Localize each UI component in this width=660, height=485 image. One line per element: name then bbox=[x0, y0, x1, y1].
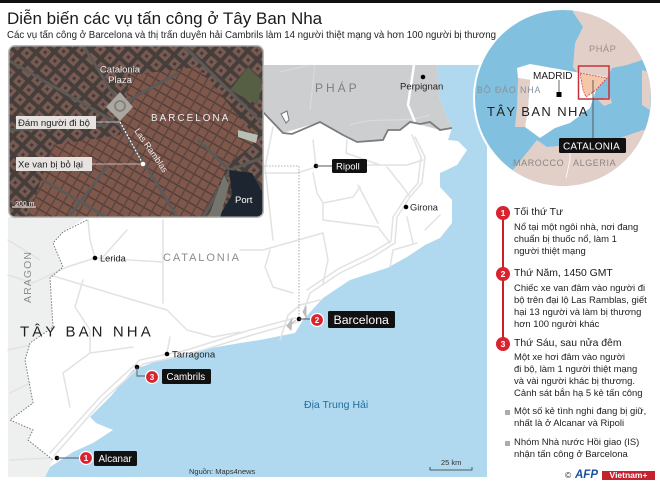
region: France grey bbox=[263, 65, 452, 142]
title: Diễn biến các vụ tấn công ở Tây Ban Nha bbox=[7, 9, 322, 28]
event 3: 3 bbox=[501, 339, 505, 349]
map labels: TÂY BAN NHA bbox=[20, 324, 154, 340]
event 2: Thứ Năm, 1450 GMT bbox=[514, 268, 613, 279]
logos bbox=[565, 469, 655, 481]
note: suspects: Một số kẻ tình nghi đang bị giữ, bbox=[514, 406, 646, 417]
scale bar bbox=[430, 458, 472, 470]
locator globe: ALGERIA bbox=[573, 158, 616, 168]
globe labels: BỒ ĐÀO NHA bbox=[477, 84, 541, 95]
tag: Cambrils: Cambrils bbox=[166, 372, 205, 383]
event 3: Cảnh sát bắn hạ 5 kẻ tấn công bbox=[514, 388, 643, 399]
border: France-Spain bbox=[263, 112, 452, 142]
Catalonia plaza bbox=[106, 92, 133, 121]
map labels: Tarragona bbox=[172, 350, 216, 360]
region: Aragon grey bbox=[8, 217, 87, 477]
satellite background bbox=[8, 45, 264, 218]
event 2: 2 bbox=[501, 269, 505, 279]
map labels: Perpignan bbox=[400, 82, 443, 92]
tag: Barcelona bbox=[310, 311, 395, 328]
event 1: người thiệt mạng bbox=[514, 246, 586, 257]
city dots bbox=[55, 75, 425, 460]
inset connector dotted bbox=[263, 166, 299, 320]
Barcelona urban bbox=[287, 306, 306, 330]
label: Pháp: PHÁP bbox=[315, 80, 360, 95]
label: Catalonia: CATALONIA bbox=[163, 252, 241, 264]
label: Barcelona: BARCELONA bbox=[151, 113, 230, 124]
plaza label: Catalonia bbox=[100, 64, 141, 76]
event 1: Nổ tại một ngôi nhà, nơi đang bbox=[514, 222, 638, 233]
tag: abandoned van bbox=[16, 157, 92, 171]
streets bbox=[8, 45, 264, 218]
tag: Cambrils bbox=[146, 369, 211, 384]
timeline line bbox=[502, 213, 504, 343]
logos: AFP bbox=[575, 469, 598, 481]
tag: Barcelona: Barcelona bbox=[334, 313, 389, 327]
event 3: đi bộ, làm 1 người thiệt mạng bbox=[514, 364, 637, 375]
map labels: Girona bbox=[410, 202, 439, 212]
port bbox=[220, 170, 262, 216]
event 2: bộ trên đại lộ Las Ramblas, giết bbox=[514, 295, 647, 306]
old town bbox=[120, 67, 258, 218]
stadium bbox=[238, 130, 258, 143]
Portugal bbox=[515, 78, 530, 127]
Catalonia bbox=[580, 73, 607, 97]
event 2: hại 13 người và làm bị thương bbox=[514, 307, 641, 318]
note: suspects bbox=[505, 406, 646, 429]
tag: Alcanar: 1 bbox=[84, 454, 89, 463]
scale bar: 25 km bbox=[441, 458, 461, 467]
source: Nguồn: Maps4news bbox=[189, 467, 256, 476]
map labels bbox=[20, 82, 443, 360]
Catalonia locator box bbox=[578, 66, 609, 99]
route bbox=[120, 122, 143, 164]
note: IS: nhận tấn công ở Barcelona bbox=[514, 449, 628, 460]
park bbox=[230, 67, 262, 105]
map labels: Lerida bbox=[100, 254, 127, 264]
tag: Ripoll bbox=[332, 159, 367, 173]
note: suspects: nhất là ở Alcanar và Ripoli bbox=[514, 418, 624, 429]
plaza label bbox=[100, 66, 140, 83]
event 2: hơn 100 người khác bbox=[514, 319, 599, 330]
border: Catalonia-Aragon dotted bbox=[10, 220, 87, 460]
plaza label: Plaza bbox=[108, 75, 133, 86]
tag: Ripoll: Ripoll bbox=[336, 162, 360, 172]
tag: pedestrians: Đám người đi bộ bbox=[18, 118, 90, 129]
event 1: 1 bbox=[501, 208, 505, 218]
top black bar bbox=[0, 0, 660, 3]
scale: 200 m bbox=[15, 201, 35, 208]
event 1 bbox=[496, 206, 638, 257]
leader lines bbox=[57, 166, 332, 458]
event 3: Một xe hơi đâm vào người bbox=[514, 352, 625, 363]
Catalonia tag bbox=[559, 80, 626, 153]
event 2: Chiếc xe van đâm vào người đi bbox=[514, 283, 645, 294]
label: Mediterranean: Địa Trung Hải bbox=[304, 399, 368, 411]
Africa bbox=[513, 130, 645, 186]
satellite inset bbox=[8, 45, 264, 218]
roads bbox=[8, 127, 440, 460]
event 3: và vài người khác bị thương. bbox=[514, 376, 635, 387]
label: Aragon: ARAGON bbox=[22, 251, 34, 303]
locator globe: TÂY BAN NHA bbox=[487, 104, 589, 119]
event 2 bbox=[496, 267, 647, 330]
Madrid marker: MADRID bbox=[533, 71, 572, 82]
subtitle: Các vụ tấn công ở Barcelona và thị trấn duyên hải Cambrils làm 14 người thiệt mạng và hơn 100 người bị thương bbox=[7, 30, 496, 41]
label: Las Ramblas: Las Ramblas bbox=[132, 126, 170, 175]
note: IS: Nhóm Nhà nước Hồi giao (IS) bbox=[514, 437, 639, 448]
locator globe bbox=[473, 10, 651, 186]
tag: Alcanar bbox=[80, 451, 137, 466]
sea bbox=[8, 65, 487, 477]
France main road white bbox=[408, 65, 415, 122]
tag: Barcelona: 2 bbox=[315, 316, 320, 325]
islands bbox=[598, 70, 652, 110]
Catalonia tag: CATALONIA bbox=[563, 142, 620, 152]
Madrid marker bbox=[533, 71, 572, 97]
France and north bbox=[573, 10, 642, 78]
lake bbox=[281, 111, 289, 123]
logos: Vietnam+ bbox=[610, 470, 647, 480]
tag: Alcanar: Alcanar bbox=[98, 454, 132, 465]
locator globe: PHÁP bbox=[589, 44, 616, 54]
locator globe: MAROCCO bbox=[513, 158, 564, 168]
tag: Cambrils: 3 bbox=[150, 373, 155, 382]
panel: timeline bbox=[496, 206, 647, 460]
logos: © bbox=[565, 470, 571, 480]
event 1: chuẩn bị thuốc nổ, làm 1 bbox=[514, 234, 617, 245]
tag: abandoned van: Xe van bị bỏ lại bbox=[18, 160, 83, 170]
event 1: Tối thứ Tư bbox=[514, 207, 563, 218]
event 3: Thứ Sáu, sau nửa đêm bbox=[514, 338, 621, 349]
label: Port: Port bbox=[235, 195, 253, 206]
globe sea bbox=[470, 8, 660, 188]
note: IS bbox=[505, 437, 639, 460]
event 3 bbox=[496, 337, 643, 399]
Spain bbox=[517, 64, 607, 138]
land: Catalonia and Spain bbox=[8, 65, 467, 477]
